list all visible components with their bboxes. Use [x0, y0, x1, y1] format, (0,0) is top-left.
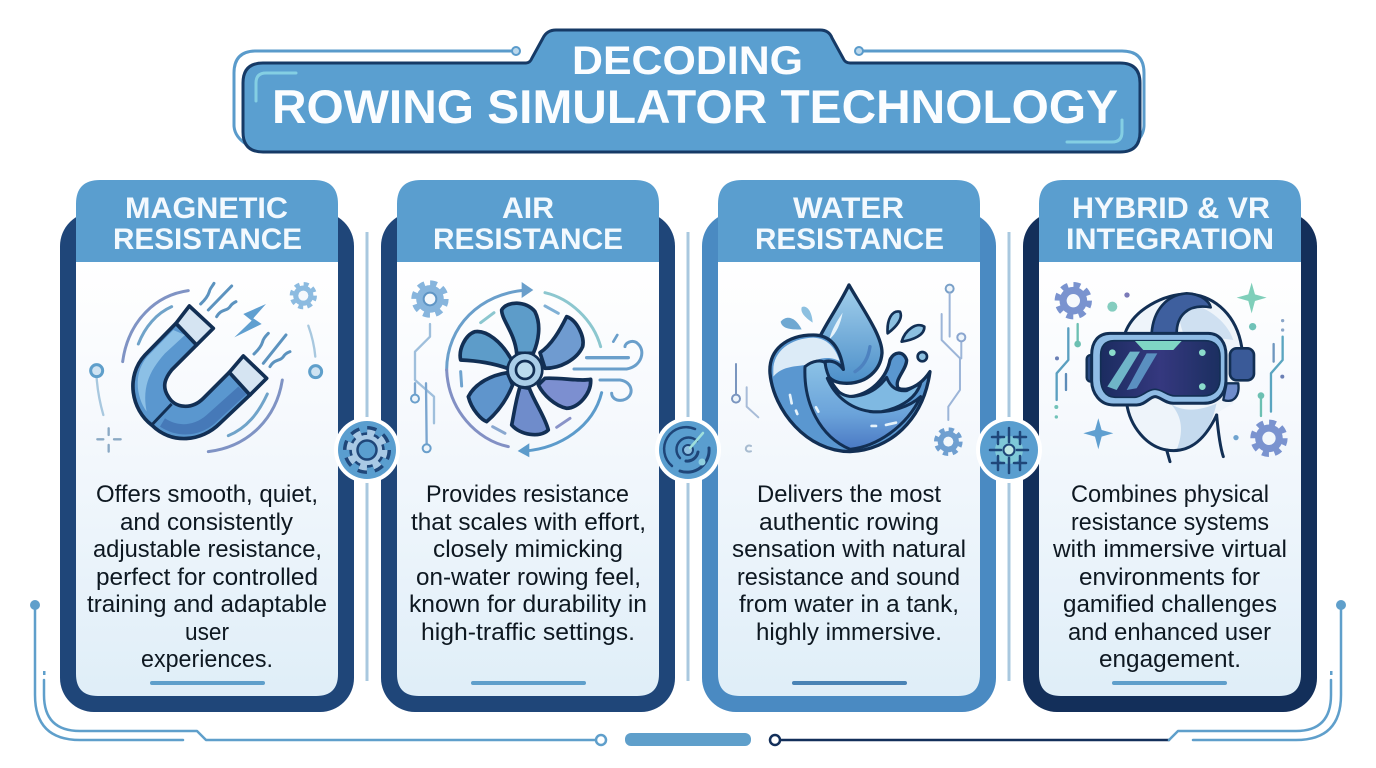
- description text: highly immersive.: [756, 619, 942, 646]
- card header: [76, 180, 338, 262]
- description text: closely mimicking: [433, 536, 623, 563]
- card header: [718, 180, 980, 262]
- description text: known for durability in: [409, 591, 647, 618]
- description text: perfect for controlled: [96, 564, 318, 591]
- heading: water resistance: RESISTANCE: [755, 223, 944, 256]
- heading: hybrid and vr integration: INTEGRATION: [1066, 223, 1274, 256]
- description text: Offers smooth, quiet,: [96, 481, 318, 508]
- footer circuit line: right: [770, 600, 1346, 745]
- heading: magnetic resistance: MAGNETIC: [125, 192, 288, 225]
- connector icon: radar: [655, 417, 721, 483]
- description text: Provides resistance: [426, 481, 629, 508]
- heading: water resistance: [755, 192, 944, 256]
- description text: and consistently: [120, 509, 294, 536]
- footer center pill: [625, 733, 751, 746]
- heading: magnetic resistance: [113, 192, 302, 256]
- card frame: [702, 212, 996, 712]
- title banner: [234, 30, 1144, 152]
- title text: [272, 39, 1118, 133]
- description text: [409, 481, 647, 646]
- icon: water drop and wave: [732, 285, 965, 454]
- heading: air resistance: [433, 192, 623, 256]
- connector icon: circuit: [976, 417, 1042, 483]
- underline accent: [471, 681, 586, 685]
- description text: Delivers the most: [757, 481, 941, 508]
- heading: magnetic resistance: RESISTANCE: [113, 223, 302, 256]
- card body: [718, 262, 980, 696]
- underline accent: [792, 681, 907, 685]
- card body: [1039, 262, 1301, 696]
- description text: [732, 481, 966, 646]
- description text: training and adaptable: [87, 591, 327, 618]
- card header: [397, 180, 659, 262]
- panel: air resistance: [381, 180, 675, 712]
- card body: [76, 262, 338, 696]
- description text: experiences.: [141, 646, 273, 673]
- card body: [397, 262, 659, 696]
- panel: magnetic resistance: [60, 180, 354, 712]
- panel: hybrid and vr integration: [1023, 180, 1317, 712]
- heading: water resistance: WATER: [793, 192, 904, 225]
- description text: sensation with natural: [732, 536, 966, 563]
- icon: vr headset on head: [1054, 283, 1285, 462]
- description text: and enhanced user: [1068, 619, 1271, 646]
- description text: adjustable resistance,: [93, 536, 322, 563]
- connector icon: gear: [334, 417, 400, 483]
- title text: DECODING: [572, 39, 803, 83]
- description text: user: [185, 619, 229, 646]
- heading: hybrid and vr integration: [1066, 192, 1274, 256]
- card frame: [60, 212, 354, 712]
- icon: fan with airflow: [411, 282, 642, 457]
- panel: water resistance: [702, 180, 996, 712]
- description text: environments for: [1079, 564, 1260, 591]
- description text: [1052, 481, 1287, 673]
- underline accent: [150, 681, 265, 685]
- description text: with immersive virtual: [1052, 536, 1287, 563]
- description text: gamified challenges: [1063, 591, 1277, 618]
- heading: hybrid and vr integration: HYBRID & VR: [1072, 192, 1270, 225]
- description text: that scales with effort,: [411, 509, 646, 536]
- card frame: [1023, 212, 1317, 712]
- description text: [87, 481, 327, 673]
- description text: from water in a tank,: [739, 591, 959, 618]
- heading: air resistance: AIR: [502, 192, 554, 225]
- description text: Combines physical: [1071, 481, 1269, 508]
- icon: horseshoe magnet: [91, 283, 322, 452]
- description text: authentic rowing: [759, 509, 939, 536]
- footer circuit line: left: [30, 600, 606, 745]
- heading: air resistance: RESISTANCE: [433, 223, 623, 256]
- divider lines between panels: [366, 232, 1010, 681]
- description text: resistance systems: [1071, 509, 1269, 536]
- card header: [1039, 180, 1301, 262]
- card frame: [381, 212, 675, 712]
- underline accent: [1112, 681, 1227, 685]
- description text: high-traffic settings.: [421, 619, 635, 646]
- description text: engagement.: [1099, 646, 1241, 673]
- description text: resistance and sound: [737, 564, 960, 591]
- description text: on-water rowing feel,: [416, 564, 641, 591]
- title text: ROWING SIMULATOR TECHNOLOGY: [272, 80, 1118, 133]
